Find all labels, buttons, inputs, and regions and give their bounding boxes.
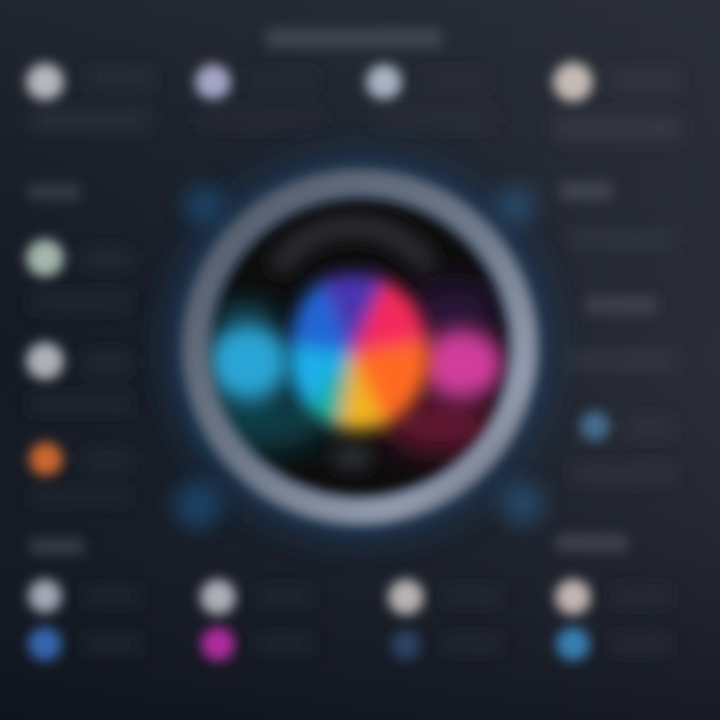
- top item 1: [26, 63, 155, 128]
- left item: grey: [26, 342, 133, 410]
- left item: orange: [29, 442, 132, 502]
- right text line: [570, 232, 675, 246]
- bottom column 1: [28, 579, 142, 661]
- purple and crimson shadows: [205, 282, 500, 453]
- right text block: [585, 296, 657, 314]
- bottom column 4: [555, 579, 672, 661]
- bottom rows of feature items: [28, 534, 672, 661]
- colour wheel: [289, 273, 429, 431]
- bottom column 3: [388, 579, 502, 660]
- left heading: [28, 184, 80, 200]
- magenta blob: [420, 328, 504, 400]
- top item 4: [553, 62, 680, 138]
- central dial: [164, 151, 556, 543]
- grey arc inside dial: [282, 227, 425, 262]
- cyan blob: [206, 322, 290, 402]
- bottom right heading: [556, 534, 628, 552]
- bottom label inside dial: [330, 444, 374, 470]
- blue halo behind ring: [164, 151, 556, 543]
- top item 3: [366, 64, 495, 126]
- bottom left heading: [30, 538, 84, 555]
- top item 2: [195, 64, 320, 126]
- right text line 2: [570, 352, 675, 368]
- left column: [26, 184, 133, 502]
- top row of feature items: [26, 62, 680, 138]
- right item: blue: [570, 411, 675, 480]
- black inner disc: [210, 198, 510, 498]
- bottom column 2: [200, 579, 314, 661]
- left item: pale green: [26, 239, 133, 308]
- right heading: [560, 182, 612, 200]
- title: [266, 28, 442, 48]
- right column: [560, 182, 675, 480]
- outer ring: [196, 183, 524, 511]
